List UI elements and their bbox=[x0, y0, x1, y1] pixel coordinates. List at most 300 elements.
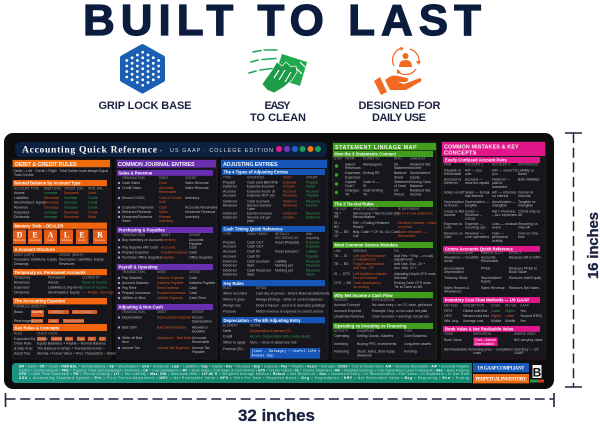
T-account structure: Drawings bbox=[14, 262, 29, 266]
sales and revenue table: TRANSACTION bbox=[122, 176, 146, 180]
heading: statement linkage map bbox=[333, 143, 436, 151]
cash timing table: Cash OUT bbox=[247, 244, 264, 248]
four types table: Accrued bbox=[306, 190, 319, 194]
purchasing and payables table: Purchase Office Supplies bbox=[122, 256, 161, 260]
purchasing and payables table bbox=[117, 227, 213, 260]
payroll and operating table: DEBIT bbox=[157, 270, 166, 274]
contra accounts table: Contra Accounts Quick Reference bbox=[445, 246, 513, 251]
key rules and concepts: RULE bbox=[14, 331, 23, 335]
four types table: Deferred bbox=[306, 216, 320, 220]
heading: debit credit rules: DEBIT & CREDIT RULES bbox=[15, 162, 77, 168]
normal balance table: Decrease bbox=[44, 201, 59, 205]
normal balance table: DEBIT (DR) bbox=[44, 186, 61, 190]
confused account pairs table: peripheral bbox=[492, 235, 508, 239]
adjusting and non-cash table: Payable bbox=[192, 350, 205, 354]
tie-out rules table: or period bbox=[398, 225, 412, 229]
confused account pairs table: Recurring vs bbox=[518, 222, 538, 226]
sales and revenue table: Cash bbox=[159, 181, 167, 185]
cash timing table: Revenue bbox=[306, 259, 320, 263]
payroll and operating table: Utilities or Misc bbox=[122, 296, 146, 300]
temporary vs permanent accounts: CLOSED BY bbox=[82, 275, 101, 279]
key rules and concepts: Expanded Eq. bbox=[14, 337, 36, 341]
confused account pairs table bbox=[443, 157, 540, 243]
adjusting and non-cash table: Depreciation Expense bbox=[157, 316, 191, 320]
four types table bbox=[222, 169, 325, 223]
inventory cost flow table: Inventory Cost Flow Methods — US GAAP bbox=[445, 298, 529, 303]
confused account pairs table: Deferred bbox=[444, 181, 458, 185]
payroll and operating table: Salaries Payable bbox=[157, 281, 183, 285]
three statements connection table: Adjust. bbox=[345, 162, 356, 166]
four types table: Revenue bbox=[306, 200, 320, 204]
heading: common journal entries bbox=[117, 160, 216, 168]
purchasing and payables table: Cash bbox=[189, 250, 197, 254]
T-account structure: CREDIT (RIGHT) bbox=[59, 253, 84, 257]
key rules and concepts: Rev. bbox=[66, 337, 72, 341]
book value and NRV table: Book Value bbox=[444, 338, 462, 342]
book value and NRV table: Net Realizable Val. bbox=[444, 347, 474, 351]
adjusting and non-cash table: Adjusting & Non-Cash bbox=[118, 305, 163, 310]
cash timing table: Payable bbox=[306, 254, 319, 258]
four types table: Cash received bbox=[247, 200, 269, 204]
tie-out rules table: TIE-OUT bbox=[334, 207, 347, 211]
payroll and operating table: Rent Expense bbox=[157, 286, 179, 290]
operating vs investing vs financing table: EXAMPLES bbox=[357, 329, 374, 333]
operating vs investing vs financing table: Stock, loans, debt repay, bbox=[357, 350, 395, 354]
confused account pairs table: intangible bbox=[492, 204, 507, 208]
depreciation table and formula: Depreciation Expense (IS) bbox=[250, 329, 291, 333]
key rules table: Always has bbox=[223, 303, 241, 307]
normal balance table: Debit bbox=[88, 215, 96, 219]
sales and revenue table: Sold bbox=[159, 200, 166, 204]
confused account pairs table: intangible bbox=[518, 204, 533, 208]
memory trick DEALER bbox=[13, 223, 107, 244]
payroll and operating table: Prepaid Insurance bbox=[122, 291, 150, 295]
cash timing table: Cash IN bbox=[247, 250, 260, 254]
four types table: Expense incurr. at bbox=[247, 190, 275, 194]
temporary vs permanent accounts: Assets bbox=[48, 280, 59, 284]
four types table: Revenue bbox=[283, 204, 297, 208]
operating vs investing vs financing table: TYPE bbox=[404, 329, 412, 333]
four types table: Expense incurred bbox=[247, 184, 274, 188]
memory trick DEALER: A bbox=[48, 230, 54, 240]
confused account pairs table: Both liabilities bbox=[518, 178, 540, 182]
mat title bar: - bbox=[160, 148, 162, 154]
tie-out rules table: Beg. Cash + CF Vs. Co. Cash bbox=[353, 230, 400, 234]
three statements connection table: INTO bbox=[394, 156, 402, 160]
contra accounts table bbox=[443, 246, 541, 294]
brand logo bbox=[530, 363, 544, 384]
panel: statement linkage map bbox=[332, 142, 436, 359]
key rules and concepts: Asset Ties: bbox=[14, 352, 31, 356]
confused account pairs table: One-off bbox=[518, 226, 530, 230]
adjusting and non-cash table: Accounts bbox=[192, 336, 207, 340]
sales and revenue table: Sales Revenue bbox=[185, 181, 209, 185]
accounting equation: The Accounting Equation bbox=[14, 299, 65, 304]
adjusting and non-cash table: Allowance bbox=[192, 326, 208, 330]
four types table: Cash paid BEFORE bbox=[247, 180, 279, 184]
accounting equation: Stockholders' bbox=[73, 310, 94, 314]
confused account pairs table: A/R — owed TO bbox=[492, 168, 518, 172]
mat title bar: Accounting Quick Reference bbox=[22, 145, 158, 156]
normal balance table: Liabilities bbox=[14, 196, 29, 200]
panel: adjusting entries bbox=[221, 159, 330, 359]
book value and NRV table: Depreciation bbox=[474, 342, 494, 346]
three statements connection table: TE bbox=[363, 192, 368, 196]
sales and revenue table: CREDIT bbox=[185, 176, 197, 180]
memory trick DEALER: Dividends bbox=[14, 238, 26, 242]
sales and revenue table: Cash bbox=[159, 206, 167, 210]
confused account pairs table: Gain bbox=[444, 235, 451, 239]
confused account pairs table: COGS only vs bbox=[518, 210, 540, 214]
confused account pairs table: Revenue — bbox=[465, 232, 484, 236]
key rules and concepts bbox=[13, 324, 115, 356]
purchasing and payables table: Purchasing & Payables bbox=[118, 228, 165, 233]
net income vs cash flow table: Accrued Expense bbox=[334, 309, 361, 313]
cash timing table: Liability bbox=[306, 250, 318, 254]
confused account pairs table: All bbox=[518, 213, 522, 217]
three statements connection table: Capital bbox=[345, 180, 356, 184]
three statements connection table: Closing Cash bbox=[410, 180, 431, 184]
contra accounts table: Book Value bbox=[509, 270, 527, 274]
four types table: Accrued bbox=[283, 190, 296, 194]
memory trick DEALER: Memory Trick – DEALER bbox=[14, 223, 63, 228]
sales and revenue table: Credit Sales bbox=[122, 186, 141, 190]
tie-out rules table: IS = bbox=[334, 221, 340, 225]
depreciation table and formula: Mon. – Once in asset-use rule bbox=[250, 340, 297, 344]
payroll and operating table: Salaries Payable bbox=[189, 281, 215, 285]
confused account pairs table: unearned bbox=[492, 185, 507, 189]
contra accounts table: Treasury Stock bbox=[444, 276, 468, 280]
label: designed for daily use bbox=[358, 100, 441, 124]
book value and NRV table: WHERE USED bbox=[514, 332, 536, 336]
tie-out rules table: TB — BS bbox=[334, 230, 349, 234]
operating vs investing vs financing table: Core Business bbox=[404, 334, 427, 338]
key rules table: Key Rules bbox=[224, 281, 244, 286]
depreciation table and formula: (Cost – Salvage) ÷ Useful Life = bbox=[252, 349, 321, 354]
cash timing table: INITIALLY bbox=[275, 232, 290, 236]
rule note: Debit = Left · Credit = Right · Total Debits must always Equal bbox=[14, 169, 108, 173]
payroll and operating table: Utilities Expense bbox=[157, 296, 183, 300]
four types table: The 4 Types of Adjusting Entries bbox=[224, 170, 289, 175]
purchasing and payables table: Buy Inventory on Account bbox=[122, 238, 162, 242]
normal balance table: Increase bbox=[44, 210, 57, 214]
badge: US GAAP compliant bbox=[473, 363, 529, 372]
three statements connection table: Statement bbox=[394, 180, 410, 184]
cash timing table: Asset (Prepaid) bbox=[275, 240, 299, 244]
confused account pairs table: Asset bbox=[518, 172, 527, 176]
cash timing table: Nothing yet bbox=[275, 263, 293, 267]
inventory cost flow table: LIFO bbox=[444, 314, 452, 318]
contra accounts table: Reduces Net Sales bbox=[509, 286, 539, 290]
book value and NRV table bbox=[443, 326, 542, 355]
purchasing and payables table: Cash bbox=[189, 246, 197, 250]
book value and NRV table: TERM bbox=[444, 332, 453, 336]
cash timing table: Accrued bbox=[223, 254, 236, 258]
four types table: CREDIT bbox=[306, 176, 318, 180]
inventory cost flow table: Middle bbox=[491, 319, 501, 323]
four types table: Service not yet bbox=[247, 216, 270, 220]
sales and revenue table: Prepaid bbox=[159, 215, 171, 219]
confused account pairs table: Amortization — bbox=[492, 200, 516, 204]
tie-out rules table: The 3 Tie-Out Rules bbox=[334, 202, 374, 207]
cash timing table: Expense bbox=[306, 240, 320, 244]
adjusting and non-cash table: DEBIT bbox=[157, 310, 166, 314]
tie-out rules table: Error in one statement bbox=[398, 212, 433, 216]
confused account pairs table: Gross — bbox=[465, 210, 479, 214]
purchasing and payables table: TRANSACTION bbox=[122, 233, 146, 237]
four types table: Accrued bbox=[223, 190, 236, 194]
sales and revenue table: Inventory bbox=[159, 219, 174, 223]
three statements connection table: TE bbox=[345, 192, 350, 196]
book value and NRV table: GAAP bbox=[514, 351, 524, 355]
three statements connection table: Statement bbox=[394, 166, 410, 170]
tie-out rules table bbox=[333, 201, 436, 238]
common source mistakes table: Tie to Cash on BS bbox=[394, 285, 423, 289]
sales and revenue table: Returned Revenue bbox=[122, 210, 151, 214]
purchasing and payables table: Pay Supplier with Cash bbox=[122, 246, 158, 250]
memory trick DEALER: R bbox=[97, 230, 103, 240]
three statements connection table: Retained Net bbox=[410, 188, 430, 192]
sales and revenue table: Sales & Revenue bbox=[118, 170, 153, 175]
adjusting and non-cash table: Income Tax Expense bbox=[157, 346, 189, 350]
four types table: Asset bbox=[306, 184, 315, 188]
cash timing table: Deferred bbox=[223, 263, 237, 267]
confused account pairs table: incurred unpaid bbox=[465, 181, 489, 185]
three statements connection table: Expenses bbox=[345, 176, 361, 180]
key rules table: When recorded bbox=[223, 292, 247, 296]
key rules and concepts: QUICK LOGIC bbox=[37, 331, 59, 335]
confused account pairs table: Payable vs bbox=[444, 168, 461, 172]
contra accounts table: Sales Returns & bbox=[444, 286, 470, 290]
sales and revenue table: Cash Sales bbox=[122, 181, 140, 185]
confused account pairs table: has interest bbox=[465, 194, 483, 198]
feature: easy to clean bbox=[249, 50, 307, 124]
heading: common mistakes and key concepts bbox=[442, 142, 545, 157]
sales and revenue table: Sales Revenue bbox=[185, 186, 209, 190]
normal balance table: Dividends bbox=[14, 215, 30, 219]
panel: common journal entries bbox=[116, 159, 218, 359]
panel: debit and credit rules bbox=[12, 159, 115, 359]
contra accounts table: EFFECT bbox=[509, 251, 521, 255]
inventory cost flow table: Lower bbox=[491, 309, 501, 313]
key rules table: Last day of period – before financial statements bbox=[256, 292, 330, 296]
sales and revenue table: Cost of Goods bbox=[159, 196, 182, 200]
accounting equation: FORMULA: ASSETS = bbox=[14, 305, 47, 309]
purchasing and payables table: Supplies bbox=[161, 256, 175, 260]
common source mistakes table: MISTAKE bbox=[353, 249, 367, 253]
common source mistakes table: Add Rev. + Exp. – ex-adj. bbox=[394, 254, 434, 258]
inventory cost flow table: Lower bbox=[505, 314, 515, 318]
memory trick DEALER: L bbox=[64, 230, 69, 240]
tie-out rules table: WHAT IT LOADS bbox=[353, 207, 377, 211]
key rules and concepts: Key Rules & Concepts bbox=[14, 325, 60, 330]
cash timing table: CASH TIMING bbox=[247, 232, 268, 236]
key rules and concepts: Exp. bbox=[78, 337, 85, 341]
confused account pairs table: Net = Revenue bbox=[492, 210, 515, 214]
three statements connection table: Expenses bbox=[345, 171, 361, 175]
heading: common mistakes and key concepts: COMMON MISTAKES & KEY bbox=[444, 144, 519, 150]
T-account structure: Decreases: Liabilities, Equity bbox=[59, 258, 104, 262]
confused account pairs table: Notes vs A/P bbox=[444, 190, 465, 194]
net income vs cash flow table: Unearned Revenue bbox=[334, 314, 364, 318]
book value and NRV table: costs bbox=[473, 351, 481, 355]
sales and revenue table: Receivable bbox=[159, 190, 176, 194]
four types table: Revenue bbox=[223, 204, 237, 208]
three statements connection table: FROM bbox=[345, 156, 355, 160]
inventory cost flow table: GAAP bbox=[520, 304, 529, 308]
purchasing and payables table: CREDIT bbox=[189, 233, 201, 237]
common source mistakes table: No ending bbox=[353, 285, 369, 289]
confused account pairs table: Accrued vs bbox=[444, 178, 462, 182]
operating vs investing vs financing table: Funding bbox=[404, 350, 417, 354]
badge: US GAAP compliant: US GAAP COMPLIANT bbox=[478, 366, 525, 372]
four types table: paid bbox=[247, 219, 254, 223]
payroll and operating table: Prepaid Insurance bbox=[157, 291, 185, 295]
temporary vs permanent accounts: Temporary bbox=[14, 275, 31, 279]
operating vs investing vs financing table: Buying PPE, investments bbox=[357, 342, 397, 346]
payroll and operating table: TRANSACTION bbox=[122, 270, 146, 274]
payroll and operating table: CREDIT bbox=[189, 270, 201, 274]
normal balance table: Normal Balance by Account Type bbox=[14, 181, 81, 186]
cash timing table: Deferred bbox=[223, 268, 237, 272]
inventory cost flow table: Yes bbox=[520, 319, 526, 323]
normal balance table: Decrease bbox=[44, 205, 59, 209]
tie-out rules table: Round bbox=[353, 225, 363, 229]
confused account pairs table: Liability vs bbox=[518, 168, 534, 172]
book value and NRV table: Selling price – completion bbox=[473, 347, 513, 351]
memory trick DEALER: Equity bbox=[78, 238, 86, 242]
memory trick DEALER: E bbox=[79, 230, 85, 240]
confused account pairs table: Depreciation bbox=[444, 200, 464, 204]
contra accounts table: Accts bbox=[444, 259, 453, 263]
key rules and concepts: Normal + Future Value + Prev. Transaction – Asset bbox=[37, 352, 115, 356]
four types table: Expense NOT yet bbox=[247, 194, 275, 198]
confused account pairs table: Expense — bbox=[465, 222, 484, 226]
normal balance table: CREDIT (CR) bbox=[64, 186, 83, 190]
contra accounts table: CONTRA ACCOUNT bbox=[444, 251, 474, 255]
confused account pairs table: Receivable bbox=[444, 172, 461, 176]
confused account pairs table: ACCOUNT 2 bbox=[492, 162, 511, 166]
four types table: Payable bbox=[306, 194, 319, 198]
adjusting and non-cash table: TRANSACTION bbox=[122, 310, 146, 314]
adjusting and non-cash table: Write off Bad bbox=[122, 336, 142, 340]
key rules table bbox=[222, 280, 330, 313]
cash timing table: After bbox=[306, 232, 314, 236]
three statements connection table: Workpapers bbox=[363, 162, 382, 166]
three statements connection table: Changes bbox=[345, 188, 359, 192]
four types table: Deferred bbox=[283, 212, 297, 216]
T-account structure: Revenues bbox=[59, 262, 75, 266]
normal balance table: Increase bbox=[64, 196, 77, 200]
height dimension line bbox=[565, 133, 582, 387]
confused account pairs table: Accrued — bbox=[465, 178, 483, 182]
sales and revenue table: Accounts bbox=[159, 186, 174, 190]
four types table: DEBIT bbox=[283, 176, 292, 180]
purchasing and payables table: Inventory bbox=[161, 238, 176, 242]
temporary vs permanent accounts: Close to Income bbox=[82, 280, 107, 284]
sales and revenue table: Inventory bbox=[185, 215, 200, 219]
confused account pairs table: Gain — bbox=[492, 232, 504, 236]
three statements connection table: Income bbox=[410, 166, 422, 170]
common source mistakes table: FIX bbox=[394, 249, 400, 253]
heading: adjusting entries: ADJUSTING ENTRIES bbox=[223, 162, 278, 168]
three statements connection table: Stockholders' bbox=[410, 171, 431, 175]
cash timing table: Revenue bbox=[306, 263, 320, 267]
common source mistakes table: Add Dep. Exp., Dr + bbox=[394, 262, 425, 266]
tie-out rules table: IF DIFFERENT bbox=[398, 207, 420, 211]
inventory cost flow table: METHOD bbox=[444, 304, 459, 308]
sales and revenue table: Customer Payments bbox=[122, 206, 154, 210]
operating vs investing vs financing table: Selling Goods, Salaries bbox=[357, 334, 394, 338]
accounting equation: Assets bbox=[32, 310, 43, 314]
sales and revenue table: Sales bbox=[159, 210, 168, 214]
net income vs cash flow table: Cash received + earnings not yet rec bbox=[372, 314, 429, 318]
normal balance table: Credit bbox=[88, 210, 97, 214]
four types table: Prepaid bbox=[283, 184, 295, 188]
confused account pairs table: Deferred — bbox=[492, 178, 511, 182]
book value and NRV table: Cost – Accum. bbox=[474, 338, 497, 342]
feature: grip lock base bbox=[98, 46, 192, 112]
confused account pairs table: Gross vs Net bbox=[444, 210, 464, 214]
glossary strip: ASU = Accounting Standard Update • Prv = Prior Period Adjustment • NRV = Net Realizable Value • HFS = Held For Sale • Reported Basis • Deg = Degradation • HRV = Net Realizable Value • Beg = Beginning • End = Ending bbox=[19, 376, 469, 380]
depreciation table and formula: Depreciation – The 5th Adjusting Entry bbox=[224, 318, 301, 323]
memory trick DEALER: Assets bbox=[47, 238, 55, 242]
confused account pairs table: A/P — you bbox=[465, 168, 482, 172]
key rules and concepts: The Balance in B/S(r) + Transaction Entry – bbox=[37, 346, 105, 350]
depreciation table and formula: Credit bbox=[223, 334, 232, 338]
net income vs cash flow table: Why Net Income ≠ Cash Flow bbox=[334, 293, 393, 298]
heading: debit credit rules bbox=[13, 160, 110, 168]
key rules and concepts: Assets bbox=[38, 337, 48, 341]
payroll and operating table: Pay Salaries bbox=[122, 276, 142, 280]
temporary vs permanent accounts: Close to Income bbox=[82, 285, 107, 289]
tie-out rules table: TB = bbox=[334, 212, 342, 216]
label: designed for daily use: DESIGNED FOR bbox=[358, 100, 441, 112]
inventory cost flow table: Yes(not IFRS) bbox=[520, 314, 542, 318]
contra accounts table: Equity bbox=[481, 280, 491, 284]
sales and revenue table: Record COGS bbox=[122, 196, 145, 200]
cash timing table bbox=[222, 226, 325, 276]
four types table: Deferred bbox=[223, 200, 237, 204]
four types table: Revenue bbox=[283, 194, 297, 198]
purchasing and payables table: Payable bbox=[189, 242, 202, 246]
operating vs investing vs financing table: Operating vs Investing vs Financing bbox=[334, 324, 407, 329]
confused account pairs table: Formal vs bbox=[518, 190, 534, 194]
contra accounts table: Allowances bbox=[444, 290, 462, 294]
contra accounts table: PARENT ACCT bbox=[481, 251, 503, 255]
book value and NRV table: DEFINITION bbox=[473, 332, 492, 336]
common source mistakes table: Left Additions mistake bbox=[353, 272, 387, 276]
rule note: Total Credits bbox=[14, 173, 34, 177]
payroll and operating table: Payroll & Operating bbox=[118, 265, 158, 270]
tie-out rules table: BS bbox=[334, 225, 339, 229]
common source mistakes table: or adjustments bbox=[353, 258, 376, 262]
tie-out rules table: Reconciled bbox=[398, 234, 415, 238]
operating vs investing vs financing table: ACTIVITY bbox=[334, 329, 349, 333]
tie-out rules table: Cash mismatch — bbox=[398, 230, 427, 234]
three statements connection table: Cash in — bbox=[363, 180, 380, 184]
feature: designed for daily use bbox=[358, 47, 441, 124]
tie-out rules table: Net Income = Net Income (IS) bbox=[353, 212, 399, 216]
confused account pairs table: event bbox=[492, 226, 501, 230]
confused account pairs table: – ALL expenses bbox=[492, 213, 517, 217]
accounting equation: Stockholders bbox=[64, 319, 84, 323]
key rules and concepts: Liabilit. bbox=[52, 337, 62, 341]
normal balance table: Increase bbox=[64, 205, 77, 209]
adjusting and non-cash table: Depreciation bbox=[192, 320, 212, 324]
adjusting and non-cash table: Accum. bbox=[192, 316, 204, 320]
payroll and operating table: Cash bbox=[189, 286, 197, 290]
